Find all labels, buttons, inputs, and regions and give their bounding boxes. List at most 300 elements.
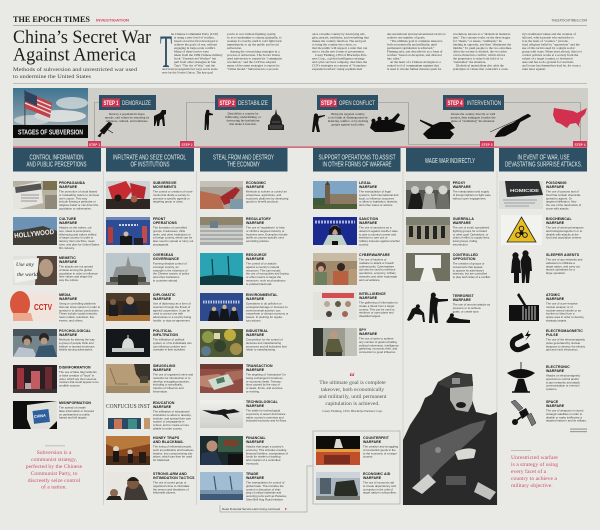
photo: american flag and sky [13, 88, 88, 138]
item: economic aid warfare: corruption in the orbit of [363, 487, 393, 491]
item: poisoning warfare: The use of poisons and of [546, 190, 579, 194]
item: transaction warfare: tions caused by the stop of [246, 383, 280, 387]
item: disinformation: The use of false flag incidents [59, 370, 97, 374]
item: intelligence warfare: country. This can be used to [359, 307, 395, 311]
subtitle [13, 66, 137, 80]
item: culture warfare [13, 217, 100, 250]
item: environmental warfare: exacerbate or disrupt economy or [246, 312, 288, 316]
intro column 4: warfare "based on deception, and directed [387, 53, 442, 58]
item: counterfeit warfare: to the economic of a target [363, 451, 397, 455]
intro column 6: and looser has themselves lead be, for want a [522, 64, 581, 69]
item: memetic warfare: the world [17, 272, 38, 278]
item: guerrilla warfare: fighting groups for a limited [453, 229, 487, 233]
item: controlled opposition: OPPOSITION [453, 257, 476, 261]
source caption [570, 428, 587, 432]
masthead: THE EPOCH TIMES [13, 15, 91, 24]
item: space warfare: SPACE [546, 400, 559, 404]
intro column 5: for "thesis," or issues, "antithesis," its [453, 39, 503, 44]
step 3 open conflict: to its brink of disintegration by [328, 116, 368, 120]
item: environmental warfare [200, 293, 288, 322]
item: sleeper agents: large operation. [546, 271, 566, 275]
item: strong-arm and intimidation tactics: STRONG-ARM AND [153, 472, 187, 476]
item: subversive movements: SUBVERSIVE [153, 181, 177, 185]
item: strong-arm and intimidation tactics: INTIMIDATION TACTICS [153, 476, 195, 480]
item: counterfeit warfare: WARFARE [363, 440, 382, 444]
intro column 4 [387, 32, 446, 71]
item: resource warfare: RESOURCE [246, 253, 267, 257]
item: biochemical warfare [501, 215, 584, 245]
item: trade warfare: TRADE [246, 472, 259, 476]
header: infiltrate and seize: INFILTRATE AND SEIZE CONTROL [113, 152, 186, 161]
item: proxy warfare: PROXY [453, 181, 466, 185]
intro column 3: once a hostile country by destroying reli- [312, 32, 365, 36]
item: biochemical warfare: and biological agents in or to [546, 229, 583, 233]
item: poisoning warfare [499, 181, 581, 210]
callout: unrestricted warfare: is a strategy of using [511, 461, 558, 468]
subtitle: Methods of subversion and unrestricted war used [13, 66, 137, 73]
icon: soldier [312, 113, 325, 132]
step 1 demoralize: morale, and values by attacking its [105, 116, 150, 120]
item: environmental warfare: ecological damage or focused on [246, 305, 288, 309]
item: cyberwarfare: CYBERWARFARE [359, 253, 390, 257]
item: misinformation: false information or focused [59, 409, 94, 413]
item: legal warfare: local, to influence outcomes [359, 196, 395, 200]
item: smuggling warfare: develop smuggling practices, [153, 379, 190, 383]
item: media warfare: that can show opinion in order to [59, 305, 101, 309]
intro text [160, 26, 582, 78]
item: memetic warfare: population in order to influence [59, 271, 98, 275]
step 3 open conflict [312, 95, 405, 132]
item: regulatory warfare: REGULATORY [246, 217, 272, 221]
item: economic aid warfare [316, 472, 397, 500]
item: spy warfare: gathering, economic theft, and [359, 347, 398, 351]
item: cyberwarfare: and surveillance. [359, 278, 381, 282]
intro column 2: revolution," and the CCP has adopted [227, 60, 276, 65]
item: sanction warfare: SANCTION [359, 217, 378, 221]
header: surprise attacks [499, 148, 587, 172]
tag: step 1 [88, 141, 101, 148]
item: political infiltration: POLITICAL [153, 329, 173, 333]
item: political infiltration: can influence policies and [153, 344, 186, 348]
item: electronic warfare: ELECTRONIC [546, 365, 570, 369]
item: memetic warfare: WARFARE [59, 260, 78, 264]
subtitle: to undermine the United States [13, 74, 91, 80]
intro column 2: used subversion to expand its "communist [227, 57, 282, 61]
intro column 5: revolution, known as a "dialectical material- [453, 32, 511, 37]
callout: unrestricted warfare: country to achieve a [511, 476, 557, 482]
callout: subversion: discreetly seize control [28, 478, 81, 484]
step 3 open conflict: groups against each other. [331, 122, 365, 126]
item: political infiltration: overtake in their activities. [153, 348, 186, 352]
item: economic warfare: goods to benefit products. [246, 200, 279, 204]
intro column 2: process of subversion. The Soviet Union [227, 53, 280, 57]
item: environmental warfare: Operations to do pollution or [246, 302, 282, 306]
item: financial warfare: monopoly. [246, 462, 259, 466]
item: electronic warfare: WARFARE [546, 369, 565, 373]
item: diplomatic warfare: Use of diplomacy as a form of [153, 302, 191, 306]
item: guerrilla warfare: GUERRILLA [453, 217, 474, 221]
item: terrorist warfare [407, 293, 491, 323]
item: subversive movements: promote a specific agenda or [153, 196, 190, 200]
item: trade warfare: global trade. This includes the [246, 484, 284, 488]
header: control information [13, 148, 101, 172]
intro column 6: control policies works at a society from the [522, 53, 579, 57]
item: economic aid warfare: target nation's ruling elites. [363, 491, 397, 495]
item: misinformation: on partisanized or public [59, 412, 90, 416]
item: legal warfare: systems, both international and [359, 193, 399, 197]
intro column 6: tailored, which people who subscribe to [522, 36, 574, 41]
item: technological warfare: The battle for technological [246, 408, 281, 412]
item: education warfare: WARFARE [153, 405, 172, 409]
item: environmental warfare: assets. In pushing for regula- [246, 315, 283, 319]
intro column 5: After the society is divided, the two sides [453, 50, 508, 55]
item: sleeper agents: target nation, and carry out [546, 264, 580, 268]
item: strong-arm and intimidation tactics: organized crime to intimidate [153, 484, 190, 488]
item: proxy warfare [406, 181, 491, 209]
item: honey traps and blackmail: leaders, into compromising situ- [153, 451, 193, 455]
callout: unrestricted warfare: military objective. [511, 483, 553, 489]
item: psychological warfare: beliefs among adversaries. [59, 348, 93, 352]
callout: subversion: of a nation. [41, 484, 67, 491]
intro column 4: permanent capitulation is achieved," [387, 46, 435, 51]
item: biochemical warfare: disable with attacks at the [546, 232, 579, 236]
intro column 3 [312, 32, 369, 71]
item: atomic warfare: nuclear-armed missile or as [546, 308, 582, 312]
tag: step 3: STEP 3 [482, 142, 493, 147]
item: strong-arm and intimidation tactics: the person and dissidents of [153, 487, 189, 491]
header: infiltrate and seize: OF INSTITUTIONS [130, 160, 170, 169]
item: electromagnetic pulse: The use of the electromagnetic [546, 338, 586, 342]
item: counterfeit warfare [316, 436, 399, 465]
item: smuggling warfare [106, 364, 193, 394]
item: space warfare: WARFARE [546, 404, 565, 408]
item: misinformation: MISINFORMATION [59, 401, 91, 405]
intro column 3: expanded warfare" using sophisticated [312, 67, 363, 71]
item: resource warfare: or other means to target the [246, 275, 282, 279]
item: electronic warfare: spectrum to control and/or [546, 377, 579, 381]
pull quote: takeover, both economically [321, 387, 384, 393]
item: transaction warfare: or reviving. [246, 390, 260, 394]
header: support operations: IN OTHER FORMS OF WARFARE [322, 160, 392, 169]
icon: capitol building [268, 109, 284, 130]
item: resource warfare [200, 253, 289, 286]
item: honey traps and blackmail: for blackmail. [153, 458, 170, 462]
item: misinformation: CHINA [34, 414, 46, 419]
item: intelligence warfare: create a threat from a target [359, 304, 394, 308]
item: proxy warfare: The manipulation and supply [453, 190, 490, 194]
icon: troops in boat [370, 113, 405, 132]
item: memetic warfare: of ideas among the global [59, 268, 92, 272]
item: front operations: The formation of controlled [153, 226, 187, 230]
item: education warfare: The infiltration of educational [153, 410, 190, 414]
header: wage war indirectly: WAGE WAR INDIRECTLY [425, 156, 475, 165]
item: transaction warfare: TRANSACTION [246, 364, 273, 368]
item: subversive movements: MOVEMENTS [153, 185, 177, 189]
step 1 demoralize: DEMORALIZE [122, 100, 151, 107]
intro column 4: is used to invoke further massive push for [387, 67, 442, 71]
step 4 intervention: guise of "stabilizing" the situation. [451, 119, 495, 123]
item: atomic warfare: nuclear weapon or of [546, 305, 573, 309]
item: industrial warfare: Competition for the control of [246, 338, 283, 342]
intro column 3: that the public will support a ruler that can [312, 46, 368, 50]
item: trade warfare: WARFARE [246, 476, 265, 480]
item: psychological warfare: a group of people think and [59, 341, 94, 345]
intro column 1: Many of these tactics were [174, 50, 209, 54]
item: disinformation: or false creation of "facts" in [59, 373, 95, 377]
item: guerrilla warfare: chain of effect to supply lines, [453, 236, 490, 240]
header: steal and destroy: THE ECONOMY [227, 160, 260, 169]
item: spy warfare [313, 328, 399, 356]
item: economic warfare: Methods to subvert or control an [246, 190, 287, 194]
item: psychological warfare [13, 329, 95, 357]
step 2 destabilize: destroying the institutions [226, 118, 260, 122]
item: education warfare [106, 401, 192, 430]
step 4 intervention: proxies, then subjugate it under the [451, 116, 496, 120]
item: memetic warfare: Use any [16, 262, 34, 268]
item: front operations: groups, businesses, think [153, 229, 186, 233]
item: media warfare [10, 291, 101, 322]
item: transaction warfare: or economic deals. Transac- [246, 379, 282, 383]
item: space warfare: The use of weapons in stored [546, 408, 584, 412]
item: electromagnetic pulse: grid and most electronics. [546, 348, 579, 352]
item: diplomatic warfare: DIPLOMATIC [153, 293, 176, 297]
item: propaganda warfare: PROPAGANDA [59, 181, 85, 185]
item: atomic warfare: The use of a pre-emptive [546, 302, 578, 306]
item: regulatory warfare [200, 217, 288, 245]
item: biochemical warfare: BIOCHEMICAL [546, 217, 573, 221]
item: education warfare: EDUCATION [153, 401, 175, 405]
item: overseas governance: Forming shadow control of [153, 262, 187, 266]
intro column 5: binding in opposite, and then "eliminates the [453, 43, 512, 48]
item: education warfare: institutions to allow to develop, [153, 413, 192, 417]
item: smuggling warfare: SMUGGLING [153, 364, 176, 368]
icon: helicopter [490, 114, 531, 137]
item: poisoning warfare: some with attacks. [546, 206, 570, 210]
item: media warfare: MEDIA [59, 293, 71, 297]
item: legal warfare: LEGAL [359, 181, 372, 185]
item: education warfare: system or propaganda in [153, 420, 185, 424]
callout: unrestricted warfare: every facet of a [511, 468, 547, 475]
intro column 3: and cyber services company, describes the [312, 60, 368, 65]
item: memetic warfare: their values and shape the [59, 275, 93, 279]
intro column 4: into rules." [387, 57, 402, 61]
item: transaction warfare: being exchanged in business [246, 376, 283, 380]
header: control information: AND PUBLIC PERCEPTIONS [26, 160, 86, 169]
item: diplomatic warfare: adversaries or a country being [153, 315, 192, 319]
intro column 3: Casey Fleming, CEO of BlackOps Part- [315, 53, 367, 58]
panel: stages of subversion band [13, 88, 588, 148]
step 4 intervention: INTERVENTION [467, 100, 501, 107]
tag: step 2 [180, 141, 194, 148]
item: sleeper agents [511, 250, 583, 283]
item: biochemical warfare: WARFARE [546, 221, 565, 225]
item: proxy warfare: of foreign fighters to fight wars [453, 193, 491, 197]
item: regulatory warfare: or inhibit a targeted industry or [246, 229, 284, 233]
item: subversive movements: targeting group or class. [153, 200, 184, 204]
item: resource warfare: resources, such as phosphorus [246, 278, 286, 282]
intro text: T [160, 26, 172, 78]
item: poisoning warfare: WARFARE [546, 185, 565, 189]
item: biochemical warfare: food and population centers. [546, 236, 582, 240]
icon: US map [553, 108, 587, 128]
item: overseas governance: OVERSEAS [153, 253, 174, 257]
item: space warfare: strategic satellites in order to [546, 412, 583, 416]
item: propaganda warfare: or misleading nature to promote [59, 193, 100, 197]
item: electromagnetic pulse: pulse generated by nuclear [546, 341, 580, 345]
item: trade warfare: control or disruption of ship- [246, 487, 281, 491]
item: counterfeit warfare: COUNTERFEIT [363, 436, 390, 440]
step bar: red rule [13, 146, 587, 148]
item: culture warfare: sites, and plan for United States [59, 242, 100, 246]
intro column 2 [227, 32, 282, 71]
intro column 4: both economically and militarily, until [387, 43, 437, 48]
step 3 open conflict: OPEN CONFLICT [339, 100, 375, 107]
item: overseas governance: GOVERNANCE [153, 257, 180, 261]
item: memetic warfare: The attacks are not spread [59, 264, 93, 268]
item: sleeper agents: The use of spy networks and [546, 258, 583, 262]
item: culture warfare: HOLLYWOOD [14, 229, 54, 240]
item: front operations: FRONT [153, 217, 166, 221]
item: sanction warfare: intention to own use or [359, 236, 388, 240]
item: industrial warfare [200, 329, 287, 357]
intro column 1: achieve the goals of war, without [174, 43, 217, 48]
item: financial warfare: funds for market or backing [246, 455, 281, 459]
intro column 1: pull from older strategies in Sun [174, 60, 216, 64]
icon: satellite [511, 400, 523, 411]
item: guerrilla warfare: insurrection. [453, 242, 468, 246]
item: smuggling warfare: transfer of influence and [153, 386, 184, 390]
label: stages of subversion [13, 125, 88, 138]
intro column 5: principles of values that contradict a coun- [453, 67, 508, 71]
intro column 5: the perpetrator to seize both hold of or [453, 57, 504, 61]
item: disinformation [13, 365, 99, 393]
item: financial warfare: economy. This includes creating [246, 448, 287, 452]
item: financial warfare: financial bubbles, manipulation of [246, 451, 288, 455]
callout: unrestricted warfare [511, 454, 558, 489]
callout: subversion: Communist Party, to [31, 471, 78, 477]
item: technological warfare [200, 400, 287, 428]
item: guerrilla warfare: WARFARE [453, 221, 471, 225]
item: environmental warfare: environmental activism can [246, 308, 281, 312]
icon: satellite dish [507, 369, 535, 378]
item: overseas governance: a foreign country, an [153, 265, 179, 269]
item: atomic warfare: ATOMIC [546, 293, 560, 297]
item: spy warfare: connection to good influence. [359, 350, 396, 354]
intro column 6: tion) religious belief in "oppression" and the [522, 43, 580, 47]
item: overseas governance: example is the extension of [153, 268, 188, 272]
intro column 3: to bring the country into chaos, so [312, 43, 357, 48]
item: regulatory warfare: The use of 'regulations' to help [246, 226, 285, 230]
step 4 intervention: Invade the country directly or with [451, 112, 496, 116]
item: counterfeit warfare: country. [363, 455, 373, 459]
step 1 demoralize [98, 95, 166, 137]
item: trade warfare: Shen Bell Hog Road Initiative. [246, 498, 284, 502]
item: intelligence warfare: reinforce or open plans and [359, 311, 394, 315]
item: sleeper agents: launch operations for a [546, 268, 575, 272]
item: honey traps and blackmail: The luring of influential people, [153, 444, 192, 448]
intro column 2: many of the same strategies to export its [227, 64, 280, 68]
item: legal warfare: or allow to legislation, lawsuits, [359, 200, 398, 204]
item: terrorist warfare: goals, or create spur. [453, 309, 479, 313]
item: resource warfare: to political blackmail. [246, 282, 272, 286]
step 3 open conflict: inducing conflict, or by inciting [328, 119, 369, 124]
item: industrial warfare: processes and all industries that [246, 344, 287, 348]
item: transaction warfare: or deals, fronts, and services, [246, 386, 283, 390]
header: steal and destroy [200, 148, 288, 172]
intro column 4: unconventional and unconventional tactics to [387, 32, 446, 36]
item: financial warfare: FINANCIAL [246, 436, 267, 440]
item: overseas governance: the Chinese system of police [153, 272, 190, 276]
item: sanction warfare: deterrent against another state [359, 229, 398, 233]
item: culture warfare: ture, ideas & perceptions; [59, 229, 91, 233]
item: economic aid warfare: to create dependency and [363, 484, 396, 488]
item: poisoning warfare: POISONING [546, 181, 567, 185]
item: honey traps and blackmail: HONEY TRAPS [153, 436, 180, 440]
item: political infiltration: system or of its individuals can [153, 341, 192, 345]
intro column 3: ners Corp., a global intelligence strategy [312, 57, 365, 62]
intro column 1: taken from the 1999 Chinese military [174, 53, 223, 57]
item: education warfare: CONFUCIUS INST [106, 404, 150, 410]
item: transaction warfare [200, 364, 286, 394]
item: technological warfare: superiority to assert dominance [246, 412, 286, 416]
item: intelligence warfare: WARFARE [359, 296, 378, 300]
step 2 destabilize [204, 95, 284, 130]
icon: terrorist silhouettes [407, 304, 425, 322]
item: diplomatic warfare: agreed cooperation. It can be [153, 308, 190, 312]
item: controlled opposition [406, 253, 491, 281]
intro column 4: Fleming said, and described it as a form of [387, 50, 443, 55]
item: counterfeit warfare: of counterfeit goods in the [363, 448, 396, 452]
item: environmental warfare: WARFARE [246, 297, 265, 301]
step 1 demoralize: STEP 1 [104, 100, 119, 107]
item: electronic warfare: systems. [546, 387, 557, 391]
connector: continuation line [220, 466, 313, 512]
item: industrial warfare: relate to manufacturing. [246, 348, 276, 352]
item: disinformation: order, which are then used as [59, 377, 97, 381]
item: atomic warfare: bomber to blast from a [546, 312, 575, 316]
item: proxy warfare: without open engagement. [453, 196, 486, 200]
item: guerrilla warfare [406, 217, 490, 246]
callout: subversion: perfected by the Chinese [26, 463, 83, 470]
item: trade warfare: securing ports such as Panama, [246, 494, 287, 498]
item: industrial warfare: INDUSTRIAL [246, 329, 269, 333]
header: support operations [313, 148, 400, 172]
item: environmental warfare: ENVIRONMENTAL [246, 293, 278, 297]
item: financial warfare: and creation of a controlled [246, 458, 281, 462]
item: front operations: tanks, and other institutions in [153, 232, 191, 236]
step 1 demoralize: religious, cultural, and traditions. [106, 119, 148, 124]
intro column 2: Among the overarching strategies in a [230, 50, 280, 54]
item: resource warfare: The control of or attacks [246, 262, 277, 266]
item: diplomatic warfare: hostile, or sign an agreement. [153, 318, 191, 322]
item: terrorist warfare: The use of terrorist attacks as [453, 302, 491, 306]
panel: continued items frame [313, 431, 400, 504]
column headers [13, 148, 587, 172]
intro column 2: you're at war without fighting openly, [227, 32, 276, 37]
item: cyberwarfare: malware to attack or breach [359, 261, 395, 265]
item: smuggling warfare: The use of organized crime and [153, 372, 193, 376]
item: psychological warfare: believe or spread erroneous [59, 344, 95, 348]
intro column 5: Dialectical materialism also adds the [456, 64, 504, 68]
item: proxy warfare: WARFARE [453, 185, 471, 189]
intro column 5: middle." To push people to the two extremes. [453, 46, 512, 50]
intro column 1: book "Unrestricted Warfare" but [174, 57, 216, 61]
intro column 3: rise to totally new forms of government. [312, 50, 365, 54]
item: poisoning warfare: HOMICIDE [510, 188, 539, 193]
item: spy warfare: WARFARE [359, 332, 378, 336]
title [13, 27, 152, 66]
header: steal and destroy: STEAL FROM AND DESTROY [213, 152, 274, 161]
